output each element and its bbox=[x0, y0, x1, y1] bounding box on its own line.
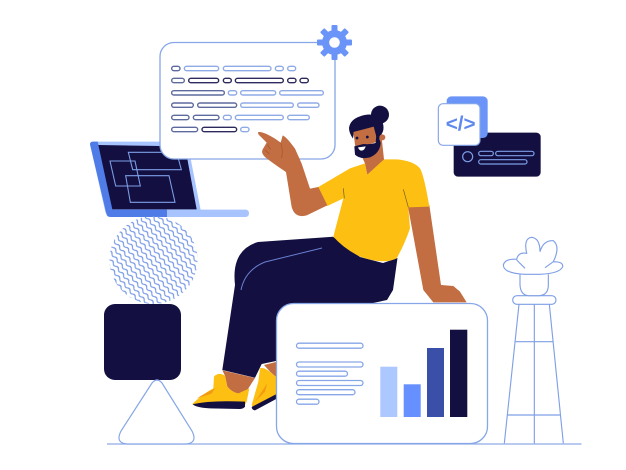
laptop lid back bbox=[90, 142, 201, 213]
stand bbox=[504, 304, 563, 443]
box card bbox=[276, 304, 488, 444]
front ankle bbox=[222, 370, 255, 394]
plant on stand bbox=[503, 237, 563, 443]
pointing arm bbox=[258, 132, 327, 216]
front shoe shade bbox=[197, 388, 215, 398]
message lines bbox=[479, 151, 534, 164]
laptop base bbox=[106, 210, 249, 217]
smile bbox=[358, 146, 366, 151]
neck bbox=[361, 138, 384, 175]
front shoe sole bbox=[193, 401, 245, 409]
ear bbox=[379, 134, 385, 140]
hair bun bbox=[371, 106, 389, 124]
stand top bbox=[513, 296, 556, 304]
pot bbox=[520, 274, 548, 296]
laptop bbox=[90, 142, 249, 217]
beard bbox=[354, 130, 381, 158]
code panel bbox=[160, 42, 335, 159]
blue card behind bbox=[447, 96, 488, 138]
white code card bbox=[438, 104, 480, 145]
panel card bbox=[160, 42, 335, 159]
laptop screen bbox=[98, 145, 197, 209]
data box bbox=[276, 304, 488, 444]
triangle outline bbox=[119, 380, 194, 444]
dark square block bbox=[104, 304, 181, 380]
icon: gear bbox=[317, 25, 352, 60]
screen wireframe bbox=[110, 152, 181, 202]
code symbol: </> bbox=[446, 113, 476, 136]
laptop base shade bbox=[106, 210, 167, 217]
back shoe sole bbox=[252, 394, 277, 410]
wavy circle bbox=[110, 216, 198, 304]
code lines bbox=[172, 66, 323, 132]
yellow t-shirt bbox=[318, 159, 429, 261]
dark message card bbox=[454, 133, 541, 177]
message avatar bbox=[463, 152, 473, 162]
resting arm bbox=[408, 205, 467, 302]
man bbox=[193, 106, 467, 410]
back shoe shade bbox=[255, 383, 267, 402]
box text lines bbox=[296, 343, 363, 404]
bar chart bbox=[380, 330, 467, 417]
back shoe bbox=[252, 368, 277, 409]
code tag cards bbox=[438, 96, 541, 177]
laptop lid edge bbox=[90, 142, 113, 215]
leaves bbox=[503, 237, 563, 274]
knuckle lines bbox=[265, 143, 282, 158]
sleeve creases bbox=[343, 188, 408, 207]
front shoe bbox=[193, 374, 249, 405]
trouser crease bbox=[241, 248, 322, 290]
back ankle bbox=[264, 362, 277, 378]
illustration bbox=[90, 25, 582, 445]
ground line bbox=[107, 443, 582, 445]
face bbox=[353, 127, 378, 150]
hair bbox=[349, 115, 384, 141]
eyes bbox=[356, 136, 369, 139]
trousers bbox=[222, 237, 398, 378]
